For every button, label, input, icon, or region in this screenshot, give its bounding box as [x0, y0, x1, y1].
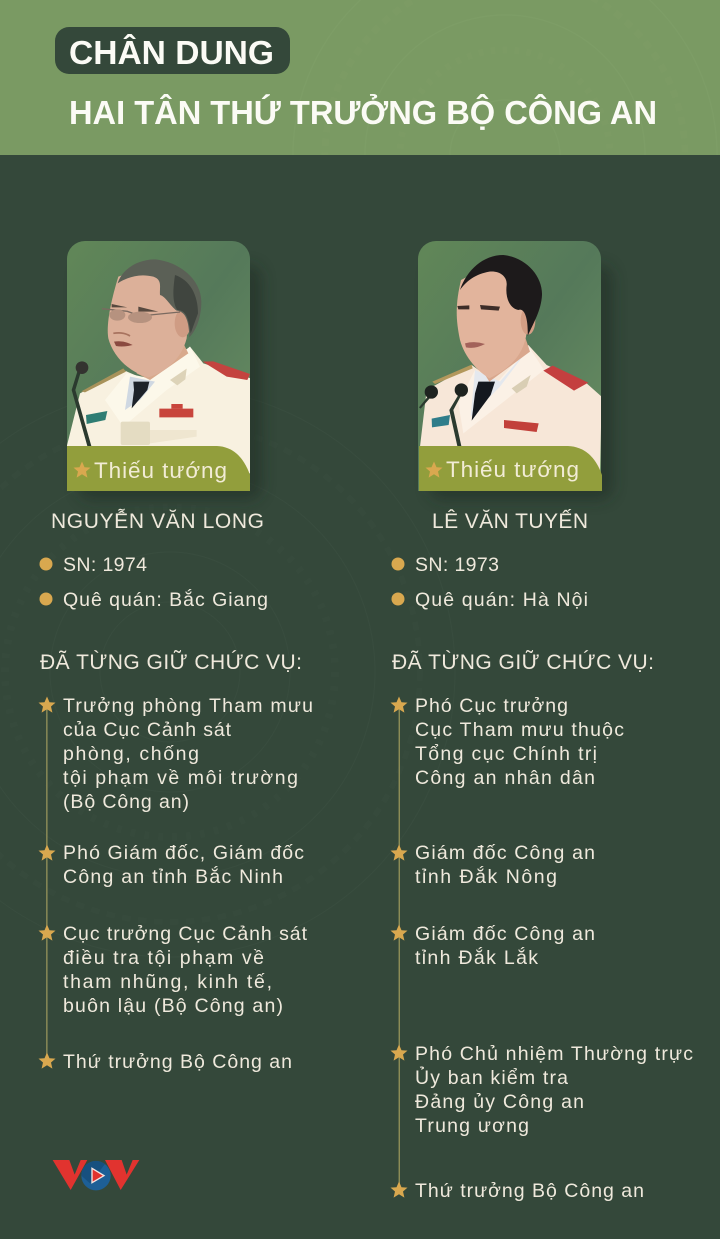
career timeline [38, 695, 313, 1073]
microphones [419, 397, 430, 408]
uniform [67, 347, 251, 473]
rank banner: Thiếu tướng [94, 458, 227, 483]
career item 1: Công an nhân dân [415, 767, 595, 789]
career item 3: Cục trưởng Cục Cảnh sát [63, 923, 308, 945]
career item 2: Công an tỉnh Bắc Ninh [63, 865, 283, 888]
column: Lê Văn Tuyến [390, 510, 693, 1202]
name: NGUYỄN VĂN LONG [51, 510, 264, 533]
career item 4: Thứ trưởng Bộ Công an [63, 1051, 292, 1073]
face [108, 275, 187, 377]
name: LÊ VĂN TUYẾN [432, 510, 588, 533]
title pill: Chân dung [55, 27, 290, 74]
career item 3: Giám đốc Công an [415, 923, 595, 945]
heading: positions held: ĐÃ TỪNG GIỮ CHỨC VỤ: [40, 650, 302, 674]
career item 1: Tổng cục Chính trị [415, 743, 597, 765]
hair [460, 255, 542, 336]
neck [137, 343, 188, 380]
hair [118, 259, 201, 337]
personal details [392, 554, 588, 611]
face [456, 272, 526, 378]
personal details [40, 554, 268, 611]
career item 1: tội phạm về môi trường [63, 767, 298, 789]
personal details: SN: 1973 [415, 554, 499, 576]
icon: star [74, 462, 90, 478]
career item 3: tỉnh Đắk Lắk [415, 946, 538, 969]
logo: VOV [53, 1160, 139, 1190]
career item 1: phòng, chống [63, 743, 199, 765]
career item 4: Phó Chủ nhiệm Thường trực [415, 1043, 693, 1065]
career item 1: (Bộ Công an) [63, 791, 189, 813]
neck [486, 338, 530, 382]
career item 1 [390, 695, 624, 789]
career item 4 [390, 1043, 693, 1137]
career item 3: tham nhũng, kinh tế, [63, 971, 272, 993]
personal details: Quê quán: Hà Nội [415, 589, 588, 611]
career item 1: Cục Tham mưu thuộc [415, 719, 624, 741]
microphone [72, 372, 91, 446]
career item 2: tỉnh Đắk Nông [415, 865, 557, 888]
header band [0, 0, 720, 155]
career item 1 [38, 695, 313, 813]
rank banner [419, 446, 602, 491]
career item 2: Giám đốc Công an [415, 842, 595, 864]
career item 1: Phó Cục trưởng [415, 695, 568, 717]
career item 2 [390, 842, 595, 888]
portrait card: Nguyễn Văn Long [67, 241, 262, 500]
career item 2: Phó Giám đốc, Giám đốc [63, 842, 304, 864]
personal details: SN: 1974 [63, 554, 147, 576]
career item 3 [38, 923, 308, 1017]
title line: Hai tân Thứ trưởng Bộ Công an: HAI TÂN THỨ TRƯỞNG BỘ CÔNG AN [69, 93, 657, 132]
rank banner [67, 446, 250, 491]
column: Nguyễn Văn Long [38, 510, 313, 1073]
career item 4: Ủy ban kiểm tra [415, 1065, 568, 1089]
title pill: Chân dung: CHÂN DUNG [69, 34, 274, 72]
rank banner: Thiếu tướng [446, 457, 579, 482]
career item 4: Trung ương [415, 1115, 529, 1137]
career item 4: Đảng ủy Công an [415, 1091, 584, 1113]
heading: positions held: ĐÃ TỪNG GIỮ CHỨC VỤ: [392, 650, 654, 674]
career item 3: buôn lậu (Bộ Công an) [63, 995, 283, 1017]
personal details: Quê quán: Bắc Giang [63, 588, 268, 611]
career item 5: Thứ trưởng Bộ Công an [415, 1180, 644, 1202]
uniform [420, 345, 602, 473]
career item 3: điều tra tội phạm về [63, 947, 264, 969]
portrait card: Lê Văn Tuyến [418, 241, 613, 500]
career item 1: của Cục Cảnh sát [63, 719, 232, 741]
career timeline [390, 695, 693, 1202]
career item 3 [390, 923, 595, 969]
career item 2 [38, 842, 304, 888]
career item 1: Trưởng phòng Tham mưu [63, 695, 313, 717]
icon: star [426, 462, 442, 478]
